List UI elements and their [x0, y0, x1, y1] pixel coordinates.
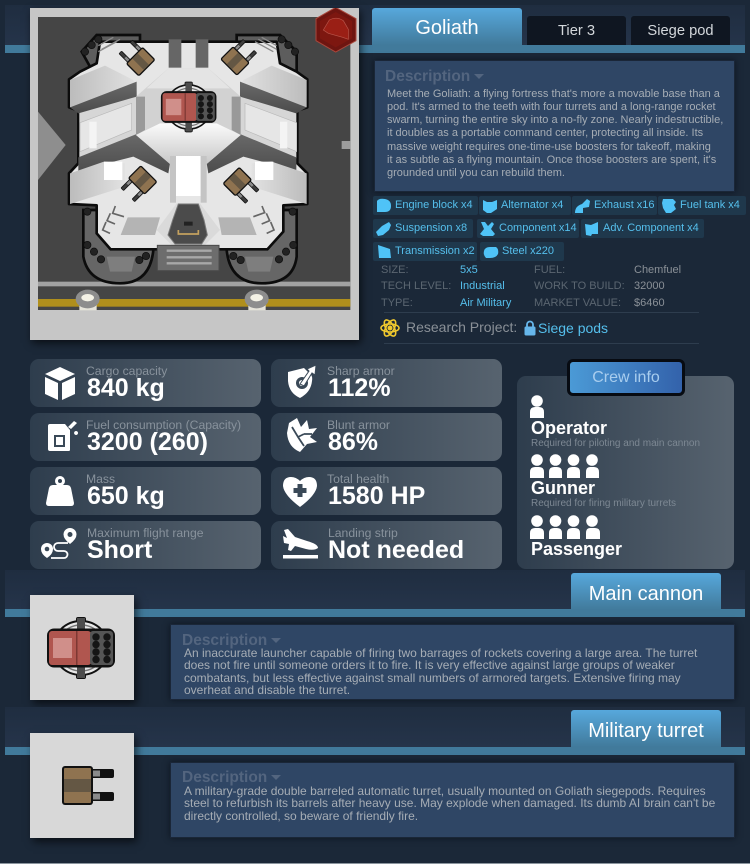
stat: mass: 650 kg: [87, 482, 165, 510]
icon: research atom: [380, 319, 400, 337]
stat: blunt armor: Blunt armor: [327, 418, 390, 432]
stat: sharp armor: 112%: [328, 374, 391, 402]
title tab: [372, 8, 522, 45]
research link: Siege pods: [538, 320, 608, 336]
stat: total health: Total health: [327, 472, 389, 486]
class tab: [631, 16, 730, 45]
header divider bar: [5, 45, 745, 53]
description text: it doubles as a portable command center, protecting all inside. Its: [387, 127, 703, 139]
header band: [5, 5, 745, 46]
exhaust nozzles: [81, 36, 299, 264]
spec table: 5x5: [460, 264, 478, 276]
chip: component: [477, 219, 579, 238]
chip: steel: Steel x220: [502, 245, 554, 257]
chip: engine block: Engine block x4: [395, 199, 473, 211]
panel: main cannon description: [170, 624, 735, 700]
stat: sharp armor: [271, 359, 502, 407]
main cannon description text: does not fire until someone orders it to fire. It is very effective against large groups of weaker: [184, 658, 675, 672]
military turret description text: [184, 784, 715, 823]
spec table: Air Military: [460, 297, 511, 309]
military turret description text: steel to refurbish its barrels after heavy use. May explode when damaged. Its dumb AI brain can't be: [184, 796, 715, 810]
spec table: $6460: [634, 297, 665, 309]
chip: exhaust: [572, 196, 657, 215]
stat: blunt armor: 86%: [328, 428, 378, 456]
stat: landing strip: Landing strip: [328, 526, 398, 540]
class tab: Siege pod: [647, 23, 714, 39]
thumbnail: main cannon: [30, 595, 134, 700]
description text: Meet the Goliath: a flying fortress that's more a movable base than a: [387, 88, 720, 100]
operator name: Operator: [531, 418, 607, 438]
spec table: WORK TO BUILD:: [534, 280, 625, 292]
stat: flight range: [30, 521, 261, 569]
spec table: SIZE:: [381, 264, 409, 276]
chip: exhaust: Exhaust x16: [594, 199, 655, 211]
stat: cargo capacity: Cargo capacity: [86, 364, 167, 378]
military turret tab: Military turret: [588, 720, 704, 742]
rear thrusters: [82, 35, 297, 283]
crew info button: [567, 359, 685, 396]
icon: box: [45, 367, 75, 400]
stat: total health: [271, 467, 502, 515]
icon: cracked shield: [287, 418, 317, 452]
chip: advanced component: [581, 219, 704, 238]
military turret divider bar: [5, 747, 745, 755]
landing posts: [76, 290, 269, 310]
stat: blunt armor: [271, 413, 502, 461]
crew info button: Crew info: [592, 369, 660, 386]
stat: sharp armor: Sharp armor: [327, 364, 395, 378]
chip: component: Component x14: [499, 222, 577, 234]
panel: military turret description: [170, 762, 735, 838]
stat: mass: [30, 467, 261, 515]
turrets: [117, 37, 261, 205]
spec table: 32000: [634, 280, 665, 292]
icon: fuel can: [48, 421, 78, 451]
icon: landing plane: [283, 529, 318, 558]
main cannon tab: Main cannon: [589, 583, 703, 605]
spec table: MARKET VALUE:: [534, 297, 621, 309]
icon: heart: [283, 477, 317, 507]
tier badge: [316, 7, 356, 52]
spec table: TYPE:: [381, 297, 413, 309]
spec table: Chemfuel: [634, 264, 681, 276]
stat: cargo capacity: 840 kg: [87, 374, 165, 402]
military turret description heading: Description: [182, 769, 267, 786]
stat: fuel consumption: 3200 (260): [87, 428, 208, 456]
description heading: Description: [385, 68, 470, 85]
icons: operator: [530, 395, 544, 418]
chip: transmission: Transmission x2: [395, 245, 475, 257]
chip: transmission: [373, 242, 477, 261]
chip: fuel tank: [658, 196, 746, 215]
spec table: Industrial: [460, 280, 505, 292]
icons: gunners: [530, 454, 599, 478]
image: Goliath siege pod top view: [30, 8, 359, 340]
stat: total health: 1580 HP: [328, 482, 425, 510]
stat: mass: Mass: [86, 472, 115, 486]
description text: [387, 88, 723, 179]
research label: Research Project:: [406, 319, 517, 335]
chip: engine block: [373, 196, 478, 215]
gunner note: Required for firing military turrets: [531, 498, 676, 509]
main cannon: [161, 82, 216, 132]
chip: alternator: [479, 196, 571, 215]
main cannon tab: [571, 573, 721, 610]
title tab: Goliath: [415, 17, 479, 39]
main cannon divider bar: [5, 609, 745, 617]
chip: advanced component: Adv. Component x4: [603, 222, 699, 234]
icon: weight: [46, 476, 74, 506]
military turret description text: directly controlled, so beware of friendly fire.: [184, 809, 418, 823]
rear ramp: [157, 245, 219, 271]
spec table: [381, 264, 681, 309]
stat: flight range: Maximum flight range: [87, 526, 204, 540]
main cannon band: [5, 570, 745, 610]
operator note: Required for piloting and main cannon: [531, 438, 700, 449]
chip: fuel tank: Fuel tank x4: [680, 199, 740, 211]
main cannon description heading: Description: [182, 632, 267, 649]
thumbnail: military turret: [30, 733, 134, 838]
icon: lock: [524, 320, 536, 336]
description text: grounded until you can rebuild them.: [387, 167, 565, 179]
military turret tab: [571, 710, 721, 747]
chip: suspension: [373, 219, 473, 238]
spec table: FUEL:: [534, 264, 565, 276]
main cannon description text: An inaccurate launcher capable of firing two barrages of rockets covering a large area. The turret: [184, 646, 697, 660]
stat: fuel consumption: [30, 413, 261, 461]
passenger name: Passenger: [531, 539, 622, 559]
stat: landing strip: Not needed: [328, 536, 464, 564]
panel: crew info: [517, 376, 734, 569]
main cannon description text: [184, 646, 698, 697]
icon: route: [41, 528, 76, 559]
main cannon description text: combatants, but less effective against small numbers of armored targets. Extensive firing may: [184, 671, 681, 685]
tier tab: [527, 16, 626, 45]
military turret band: [5, 707, 745, 747]
stat: cargo capacity: [30, 359, 261, 407]
description text: pod. It's armed to the teeth with four turrets and a long-range rocket: [387, 101, 716, 113]
spec table: TECH LEVEL:: [381, 280, 451, 292]
stat: fuel consumption: Fuel consumption (Capacity): [86, 418, 241, 432]
description text: swarm, turning the entire sky into a no-fly zone. Nearly indestructible,: [387, 114, 723, 126]
chip: alternator: Alternator x4: [501, 199, 563, 211]
chip: steel: [480, 242, 564, 261]
gunner name: Gunner: [531, 478, 595, 498]
pod hull: [69, 37, 307, 249]
military turret description text: A military-grade double barreled automatic turret, usually mounted on Goliath siegepods. Requires: [184, 784, 706, 798]
stat: flight range: Short: [87, 536, 152, 564]
main cannon description text: overheat and disable the turret.: [184, 683, 350, 697]
stat: landing strip: [271, 521, 502, 569]
panel: description: [374, 60, 735, 192]
description text: massive weight requires one-time-use boosters for takeoff, making: [387, 141, 711, 153]
tier tab: Tier 3: [558, 23, 595, 39]
chip: suspension: Suspension x8: [395, 222, 467, 234]
icons: passengers: [530, 515, 600, 539]
description text: it as subtle as a flying mountain. Once those boosters are spent, it's: [387, 154, 716, 166]
icon: pierced shield: [288, 366, 316, 398]
